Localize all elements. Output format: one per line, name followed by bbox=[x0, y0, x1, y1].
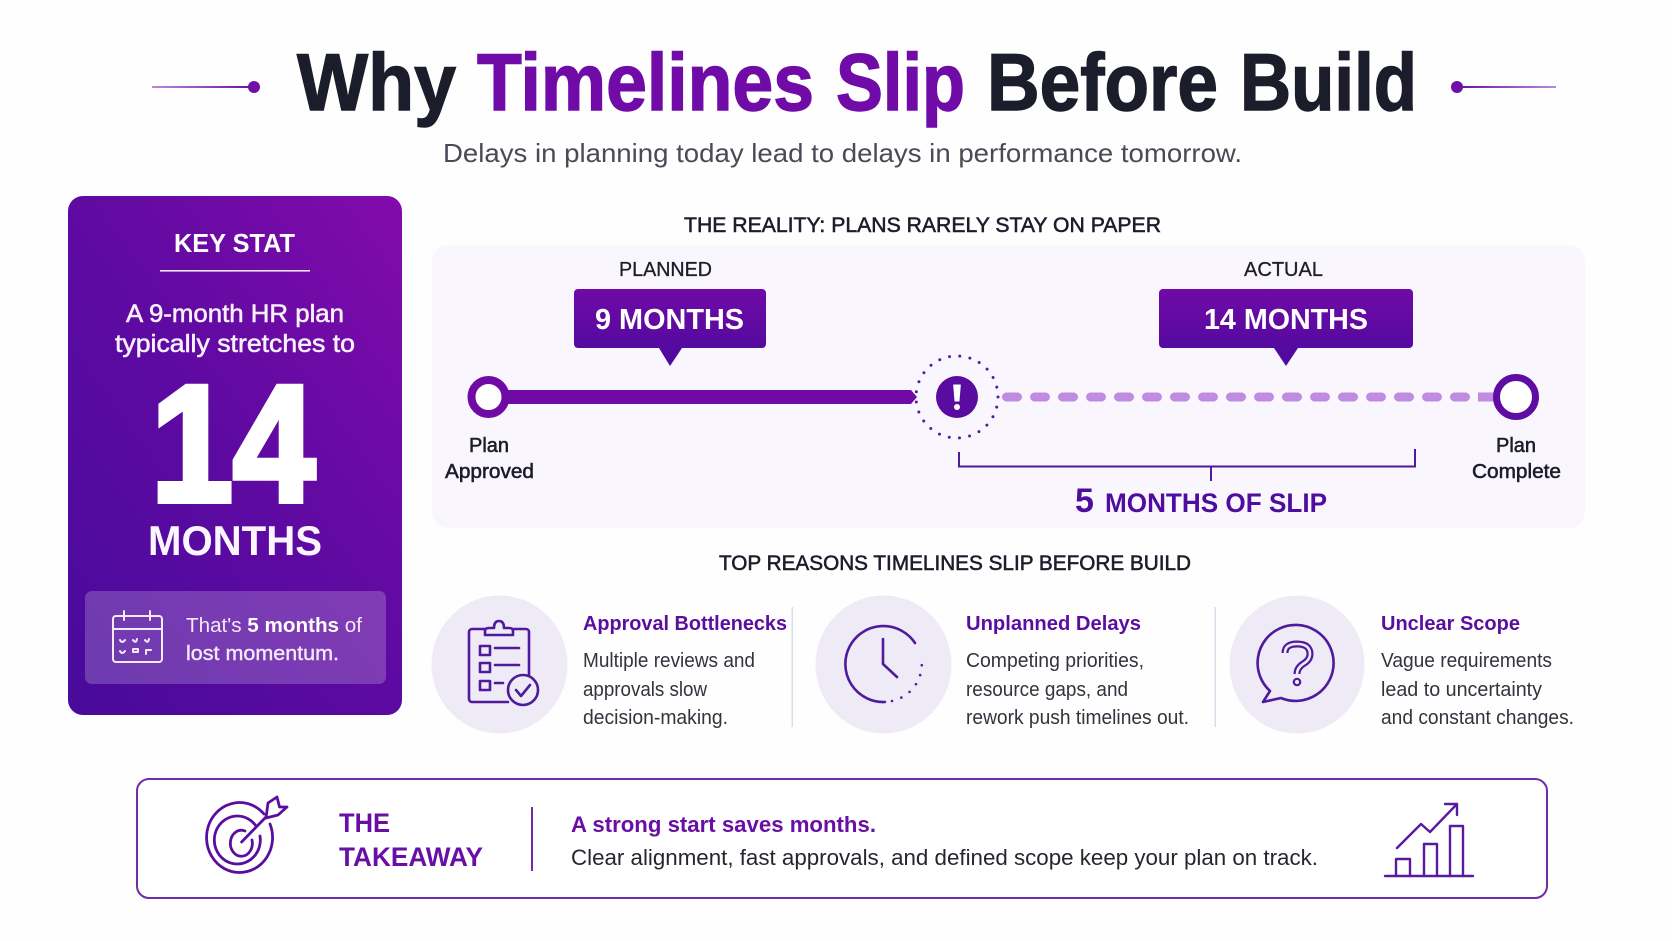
reason body: and constant changes. bbox=[1381, 707, 1574, 729]
section heading: top reasons: TOP REASONS TIMELINES SLIP BEFORE BUILD bbox=[719, 552, 1191, 575]
title: Slip bbox=[836, 38, 965, 128]
months label: MONTHS bbox=[148, 517, 322, 564]
reason body: rework push timelines out. bbox=[966, 707, 1189, 729]
title bbox=[297, 38, 1417, 128]
icon: question bubble bbox=[1230, 596, 1364, 734]
actual dashed line bbox=[1006, 392, 1500, 402]
reason: unplanned delays bbox=[816, 596, 1189, 734]
reason body: approvals slow bbox=[583, 679, 708, 701]
end node bbox=[1496, 378, 1536, 416]
lost momentum callout bbox=[85, 591, 386, 684]
plan complete label: Complete bbox=[1472, 461, 1561, 483]
callout: 9 months bbox=[574, 289, 766, 366]
key stat heading: KEY STAT bbox=[174, 228, 295, 258]
reason body: resource gaps, and bbox=[966, 679, 1128, 701]
takeaway body: Clear alignment, fast approvals, and defined scope keep your plan on track. bbox=[571, 845, 1318, 870]
title: Before bbox=[987, 38, 1218, 128]
title accent right bbox=[1451, 81, 1556, 93]
plan approved label: Approved bbox=[445, 461, 534, 483]
actual label: ACTUAL bbox=[1244, 259, 1323, 281]
plan approved label: Plan bbox=[469, 435, 509, 457]
alert marker bbox=[916, 356, 998, 438]
callout: 9 months: 9 MONTHS bbox=[595, 304, 744, 336]
planned label: PLANNED bbox=[619, 259, 712, 281]
takeaway headline: A strong start saves months. bbox=[571, 812, 876, 837]
section heading: the reality: THE REALITY: PLANS RARELY STAY ON PAPER bbox=[684, 214, 1161, 237]
takeaway label: TAKEAWAY bbox=[339, 842, 483, 872]
reason body: Multiple reviews and bbox=[583, 650, 755, 672]
panel: timeline bbox=[432, 245, 1585, 528]
title: Timelines bbox=[477, 38, 814, 128]
slip label: MONTHS OF SLIP bbox=[1105, 488, 1327, 518]
icon: calendar bbox=[113, 611, 162, 662]
icon: clipboard bbox=[432, 596, 568, 734]
title: Build bbox=[1240, 38, 1417, 128]
plan complete label: Plan bbox=[1496, 435, 1536, 457]
big number 14: 14 bbox=[151, 352, 315, 537]
icon: target bbox=[207, 797, 287, 873]
callout: 14 months bbox=[1159, 289, 1413, 366]
reason body: Vague requirements bbox=[1381, 650, 1552, 672]
reason: unclear scope bbox=[1230, 596, 1574, 734]
callout text: lost momentum. bbox=[186, 643, 339, 665]
slip bracket bbox=[959, 449, 1415, 481]
takeaway label: THE bbox=[339, 808, 390, 838]
key stat lead text: typically stretches to bbox=[115, 330, 355, 358]
reason body: decision-making. bbox=[583, 707, 728, 729]
panel: the takeaway bbox=[137, 779, 1547, 898]
callout: 14 months: 14 MONTHS bbox=[1204, 304, 1368, 336]
callout text: That's 5 months of bbox=[186, 615, 361, 637]
reason body: Competing priorities, bbox=[966, 650, 1144, 672]
subtitle: Delays in planning today lead to delays in performance tomorrow. bbox=[443, 138, 1242, 168]
panel: key stat bbox=[68, 196, 402, 715]
reason heading: Approval Bottlenecks bbox=[583, 612, 787, 635]
slip label: 5 bbox=[1075, 482, 1094, 520]
planned solid bar bbox=[500, 390, 917, 404]
icon: clock bbox=[816, 596, 952, 734]
title: Why bbox=[297, 38, 456, 128]
key stat card bbox=[68, 196, 402, 715]
reason body: lead to uncertainty bbox=[1381, 679, 1542, 701]
icon: growth chart bbox=[1385, 804, 1473, 876]
start node bbox=[472, 380, 506, 414]
reason heading: Unclear Scope bbox=[1381, 612, 1520, 635]
reason: approval bottlenecks bbox=[432, 596, 787, 734]
key stat lead text: A 9-month HR plan bbox=[126, 300, 344, 328]
reason heading: Unplanned Delays bbox=[966, 612, 1141, 635]
title accent left bbox=[152, 81, 260, 93]
